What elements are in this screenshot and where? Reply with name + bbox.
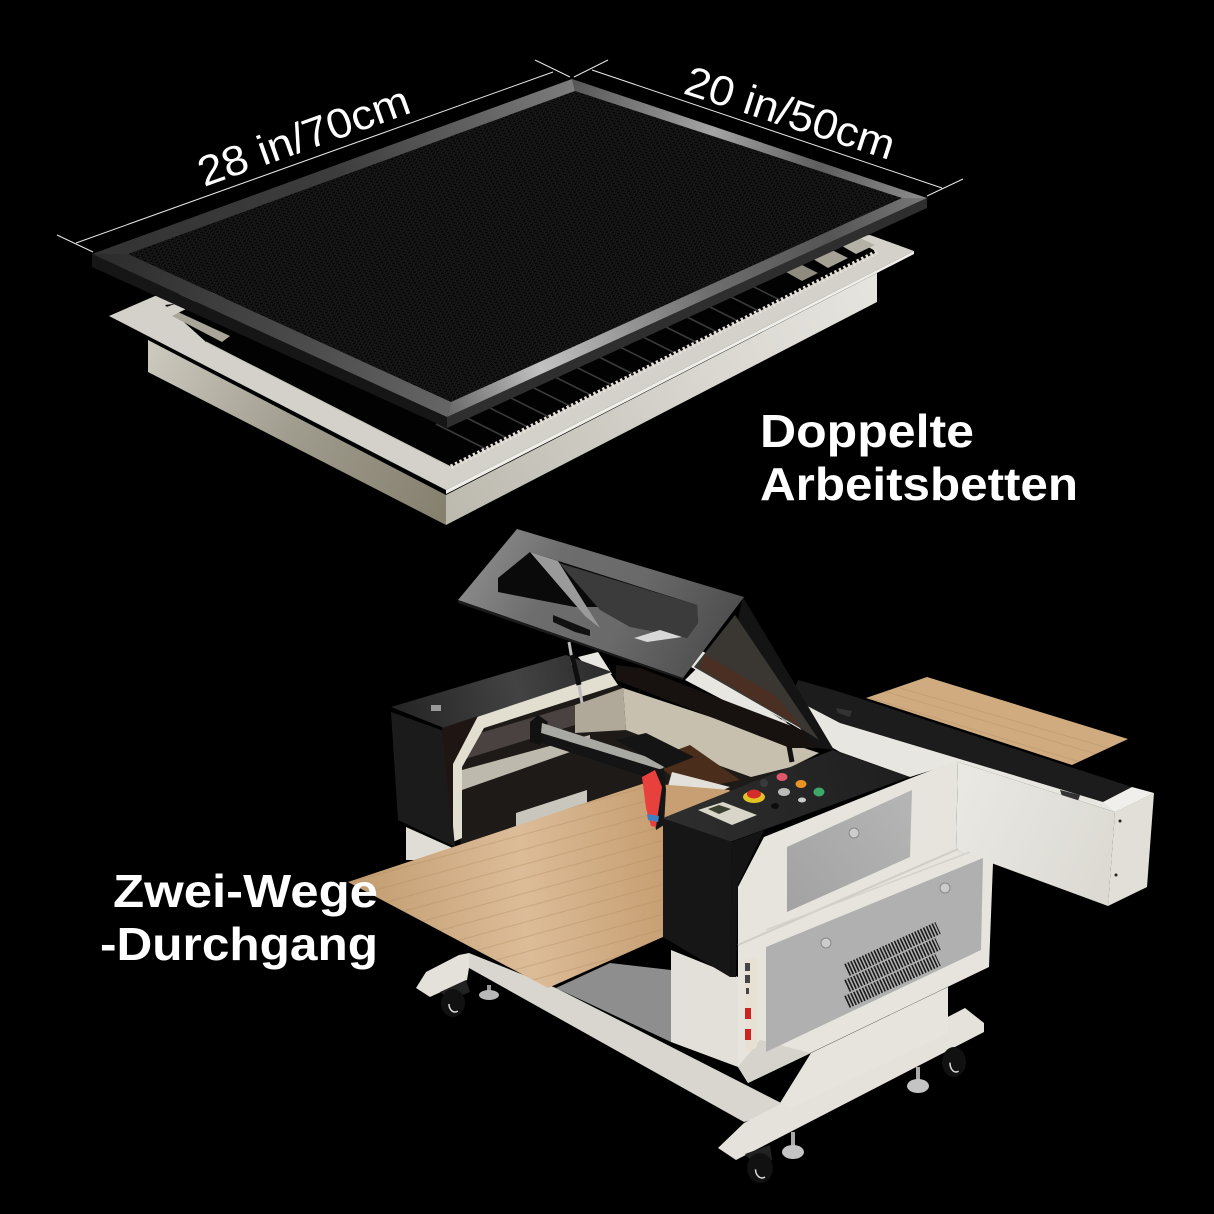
control buttons	[743, 773, 824, 809]
left side housing	[391, 652, 612, 860]
rear black rail and white top	[691, 650, 1154, 812]
gantry and laser head	[530, 715, 730, 798]
raised lid	[458, 529, 834, 750]
illustration: laser machine	[100, 405, 1154, 1183]
honeycomb panel with frame	[92, 79, 927, 428]
base frame with feet	[416, 953, 984, 1160]
lid handle	[553, 615, 590, 636]
heading: Doppelte Arbeitsbetten: Arbeitsbetten	[760, 458, 1078, 510]
machine body	[556, 760, 993, 1083]
machine interior	[442, 670, 819, 860]
right side extension pass-through	[956, 762, 1154, 906]
illustration: dual work beds	[57, 57, 963, 525]
casters and levelling feet	[440, 980, 966, 1183]
vent grille	[847, 928, 938, 1002]
connector strip	[744, 958, 757, 1053]
red laser head	[642, 768, 666, 830]
blade tray	[109, 225, 914, 525]
rear wood sheet	[866, 677, 1128, 765]
heading: Zwei-Wege -Durchgang: -Durchgang	[100, 918, 378, 970]
front wood sheet	[348, 784, 730, 988]
heading: Doppelte Arbeitsbetten: Doppelte	[760, 405, 974, 457]
control panel LCD	[698, 802, 757, 825]
label: 28 in/70cm: 28 in/70cm	[191, 76, 416, 195]
dimension line: depth	[574, 60, 963, 196]
heading: Zwei-Wege -Durchgang: Zwei-Wege	[113, 865, 378, 917]
heading: Zwei-Wege -Durchgang	[100, 865, 378, 970]
dimension line: width	[57, 60, 570, 252]
lid window	[498, 552, 698, 642]
label: 20 in/50cm: 20 in/50cm	[679, 57, 901, 169]
gas struts	[569, 642, 792, 762]
control box	[663, 750, 909, 977]
heading: Doppelte Arbeitsbetten	[760, 405, 1078, 510]
door locks	[821, 828, 950, 948]
